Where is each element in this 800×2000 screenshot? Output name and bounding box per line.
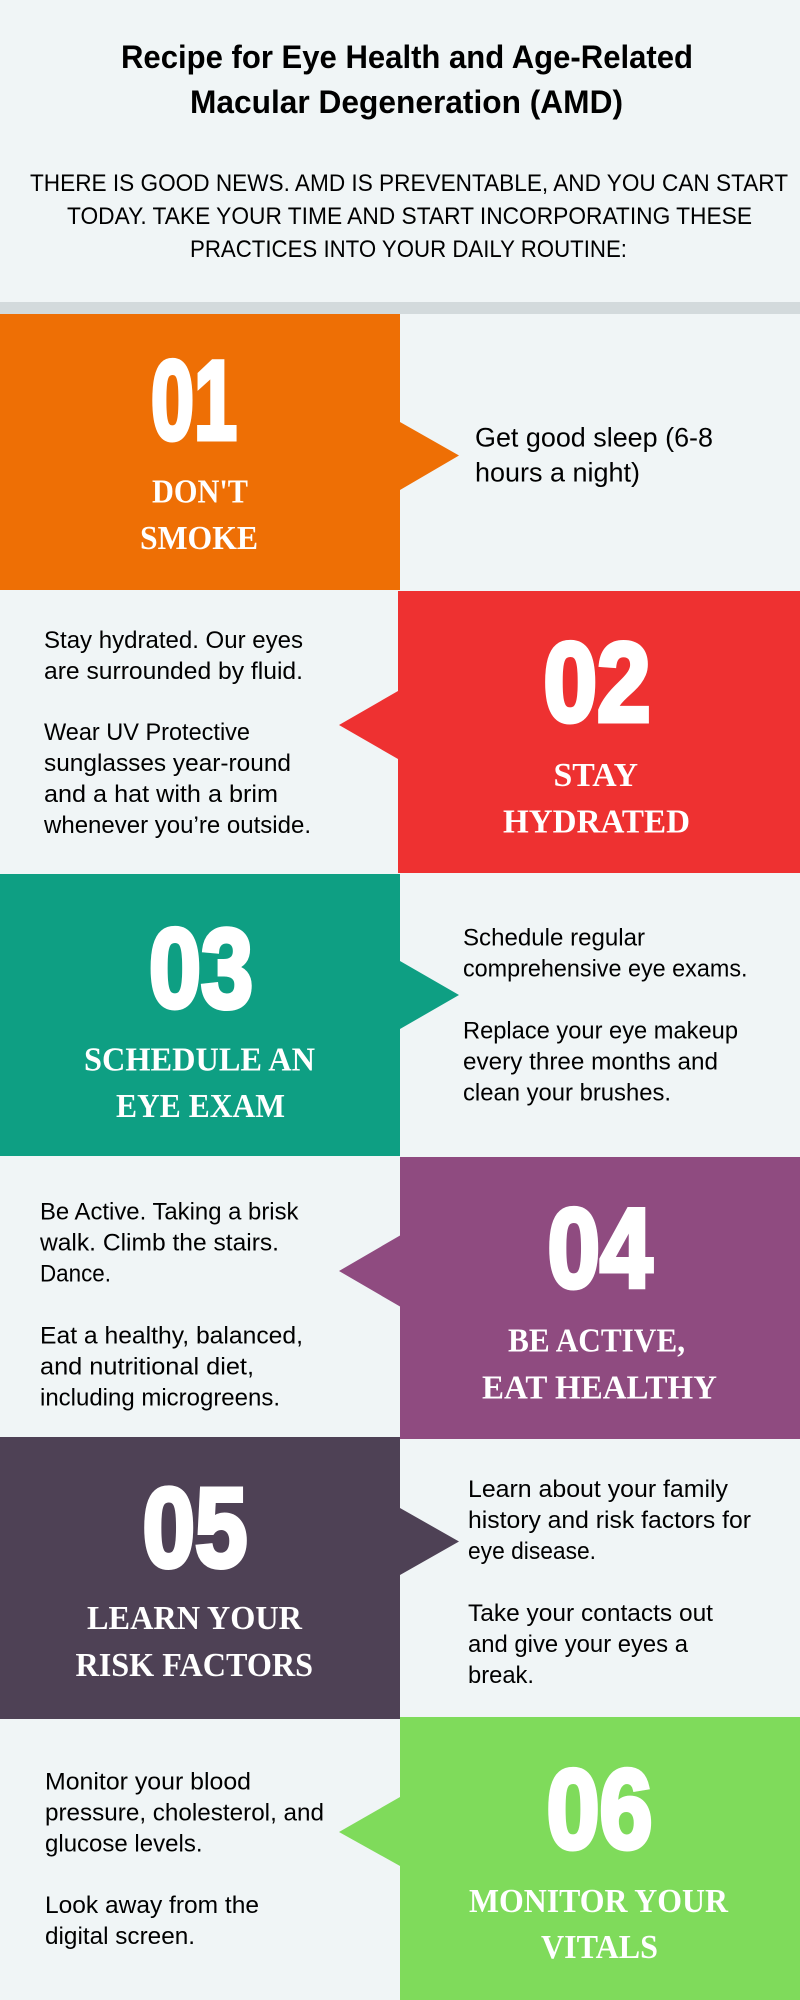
- text: hydration and sunglasses: are surrounded by fluid.: [44, 658, 303, 685]
- text: family history and contacts: eye disease.: [468, 1538, 596, 1565]
- panel: step 01 don't smoke: [0, 314, 713, 590]
- heading: monitor your vitals: [469, 1883, 728, 1966]
- text: blood pressure and screens: [45, 1768, 324, 1950]
- text: activity and diet: including microgreens.: [40, 1384, 280, 1412]
- number 01: 01: [151, 339, 237, 463]
- text: eye exams and makeup: Schedule regular: [463, 924, 645, 952]
- text: blood pressure and screens: digital screen.: [45, 1923, 195, 1950]
- text: eye exams and makeup: every three months and: [463, 1048, 718, 1076]
- number 03: 03: [149, 906, 253, 1031]
- lime block with arrow: [339, 1717, 800, 2000]
- heading: don't smoke: DON'T: [152, 474, 248, 510]
- text: family history and contacts: [468, 1476, 751, 1689]
- heading: monitor your vitals: VITALS: [541, 1929, 658, 1966]
- text: activity and diet: [39, 1198, 303, 1412]
- panel: step 05 learn your risk factors: [0, 1437, 751, 1719]
- text: eye exams and makeup: comprehensive eye exams.: [463, 956, 748, 982]
- number 02: 02: [543, 620, 651, 746]
- heading: don't smoke: SMOKE: [140, 520, 258, 557]
- dark block with arrow: [0, 1437, 459, 1719]
- text: hydration and sunglasses: and a hat with a brim: [44, 781, 278, 808]
- text: sleep: Get good sleep (6-8: [475, 422, 713, 452]
- heading: stay hydrated: HYDRATED: [503, 804, 690, 840]
- text: eye exams and makeup: clean your brushes.: [463, 1080, 671, 1106]
- heading: learn your risk factors: LEARN YOUR: [87, 1600, 302, 1637]
- panel: step 06 monitor your vitals: [45, 1717, 800, 2000]
- title: Macular Degeneration (AMD): [190, 84, 623, 120]
- intro text: [30, 170, 788, 263]
- number 05: 05: [143, 1465, 247, 1590]
- number 04: 04: [548, 1185, 652, 1311]
- heading: be active, eat healthy: [482, 1322, 717, 1406]
- heading: be active, eat healthy: EAT HEALTHY: [482, 1370, 717, 1406]
- heading: don't smoke: [140, 474, 258, 557]
- heading: schedule an eye exam: [84, 1042, 315, 1125]
- purple block with arrow: [339, 1157, 800, 1439]
- text: family history and contacts: and give your eyes a: [468, 1631, 689, 1658]
- heading: learn your risk factors: RISK FACTORS: [76, 1647, 313, 1684]
- text: family history and contacts: Take your contacts out: [468, 1600, 713, 1627]
- text: hydration and sunglasses: Wear UV Protective: [44, 719, 250, 746]
- text: hydration and sunglasses: [43, 627, 311, 839]
- heading: be active, eat healthy: BE ACTIVE,: [508, 1322, 685, 1360]
- orange block with arrow: [0, 314, 459, 590]
- text: activity and diet: and nutritional diet,: [40, 1354, 254, 1380]
- text: family history and contacts: history and risk factors for: [468, 1507, 751, 1534]
- heading: schedule an eye exam: EYE EXAM: [116, 1088, 285, 1125]
- heading: stay hydrated: STAY: [554, 757, 638, 794]
- text: blood pressure and screens: Monitor your blood: [45, 1768, 251, 1796]
- title: [121, 39, 693, 120]
- intro text: PRACTICES INTO YOUR DAILY ROUTINE:: [190, 236, 627, 263]
- text: blood pressure and screens: Look away from the: [45, 1892, 259, 1919]
- text: family history and contacts: Learn about your family: [468, 1476, 728, 1503]
- text: activity and diet: Eat a healthy, balanced,: [40, 1322, 303, 1350]
- panel: step 04 be active, eat healthy: [39, 1157, 800, 1439]
- number 06: 06: [547, 1748, 652, 1873]
- text: activity and diet: Be Active. Taking a brisk: [40, 1198, 299, 1226]
- heading: monitor your vitals: MONITOR YOUR: [469, 1883, 728, 1920]
- red block with arrow: [339, 591, 800, 873]
- text: hydration and sunglasses: Stay hydrated. Our eyes: [44, 627, 303, 654]
- text: hydration and sunglasses: sunglasses year-round: [44, 750, 291, 777]
- panel: step 02 stay hydrated: [43, 591, 800, 873]
- text: blood pressure and screens: pressure, cholesterol, and: [45, 1800, 324, 1826]
- heading: stay hydrated: [503, 757, 690, 840]
- text: hydration and sunglasses: whenever you’re outside.: [43, 812, 311, 839]
- heading: learn your risk factors: [76, 1600, 313, 1684]
- text: blood pressure and screens: glucose levels.: [45, 1830, 202, 1858]
- panel: step 03 schedule an eye exam: [0, 874, 748, 1156]
- intro text: TODAY. TAKE YOUR TIME AND START INCORPORATING THESE: [67, 203, 752, 230]
- heading: schedule an eye exam: SCHEDULE AN: [84, 1042, 315, 1078]
- text: activity and diet: Dance.: [40, 1260, 111, 1288]
- title: Recipe for Eye Health and Age-Related: [121, 39, 693, 75]
- text: activity and diet: walk. Climb the stairs.: [39, 1230, 279, 1256]
- green block with arrow: [0, 874, 459, 1156]
- text: sleep: [475, 422, 713, 488]
- text: eye exams and makeup: Replace your eye makeup: [463, 1018, 738, 1044]
- text: family history and contacts: break.: [468, 1662, 534, 1689]
- text: sleep: hours a night): [475, 458, 640, 488]
- text: eye exams and makeup: [463, 924, 748, 1106]
